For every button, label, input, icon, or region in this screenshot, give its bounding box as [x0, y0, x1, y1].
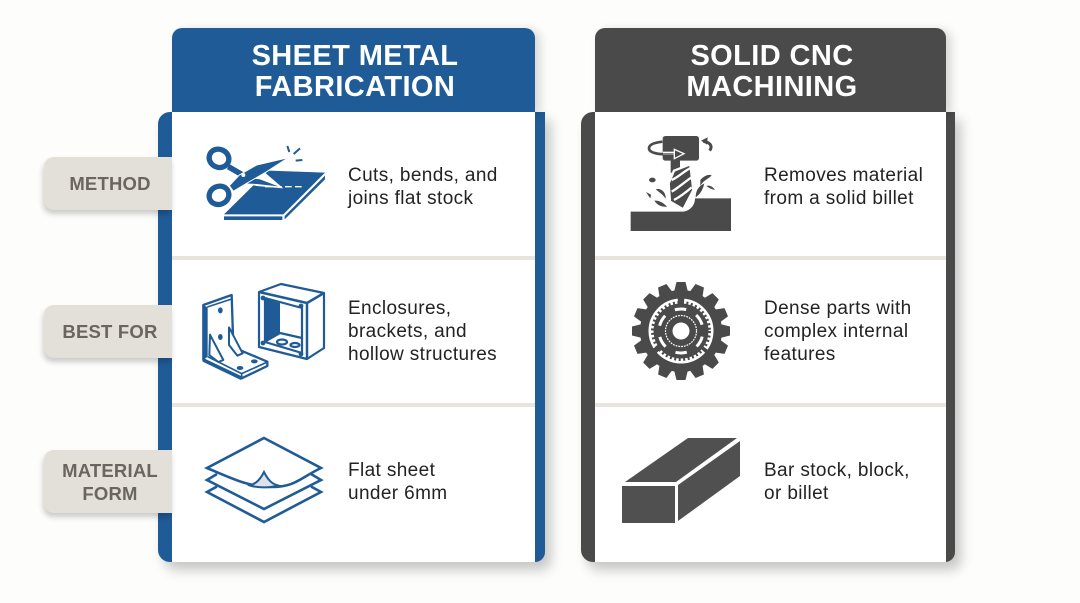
row label: best for [44, 305, 172, 358]
text: best for, sheet metal: hollow structures [348, 344, 497, 364]
text: best for, cnc: features [764, 344, 836, 364]
row label: material form: FORM [82, 482, 138, 504]
panel body: white [595, 112, 946, 562]
heading: solid cnc machining: MACHINING [686, 71, 858, 103]
panel frame: dark [581, 112, 955, 562]
panel: sheet metal fabrication [158, 26, 557, 576]
text: method, cnc: Removes material [764, 164, 923, 186]
heading: sheet metal fabrication [172, 28, 535, 112]
icon: solid bar stock block [622, 438, 740, 523]
text: best for, sheet metal [348, 298, 497, 364]
panel frame: blue [158, 112, 545, 562]
row label: method [44, 157, 172, 210]
text: material form, sheet metal: Flat sheet [348, 460, 435, 480]
row label: material form: MATERIAL [62, 460, 158, 480]
text: material form, cnc [764, 460, 910, 504]
panel body: white [172, 112, 535, 562]
text: method, cnc [764, 164, 923, 208]
text: best for, cnc: complex internal [764, 320, 908, 342]
icon: end mill cutting billet [630, 136, 731, 231]
icon: scissors cutting sheet [206, 146, 325, 220]
row label: method: METHOD [69, 173, 151, 194]
heading: sheet metal fabrication: FABRICATION [255, 71, 455, 103]
text: method, cnc: from a solid billet [764, 188, 914, 208]
icon: stacked flat sheets [204, 436, 324, 524]
text: best for, cnc: Dense parts with [764, 298, 912, 318]
text: method, sheet metal: joins flat stock [348, 188, 473, 208]
text: best for, cnc [764, 298, 912, 364]
text: method, sheet metal: Cuts, bends, and [348, 164, 498, 186]
icon: bracket and enclosure [202, 282, 326, 380]
text: best for, sheet metal: brackets, and [348, 320, 467, 342]
text: material form, sheet metal [348, 460, 448, 504]
text: material form, cnc: or billet [764, 482, 829, 504]
text: material form, sheet metal: under 6mm [348, 482, 448, 504]
row label: material form [44, 450, 172, 513]
panel: solid cnc machining [581, 26, 967, 576]
heading: solid cnc machining: SOLID CNC [690, 40, 854, 72]
text: method, sheet metal [348, 164, 498, 208]
text: best for, sheet metal: Enclosures, [348, 298, 451, 318]
heading: solid cnc machining [595, 28, 946, 112]
heading: sheet metal fabrication: SHEET METAL [252, 40, 458, 72]
row label: best for: BEST FOR [62, 321, 158, 342]
icon: complex gear [632, 282, 730, 380]
text: material form, cnc: Bar stock, block, [764, 460, 910, 480]
